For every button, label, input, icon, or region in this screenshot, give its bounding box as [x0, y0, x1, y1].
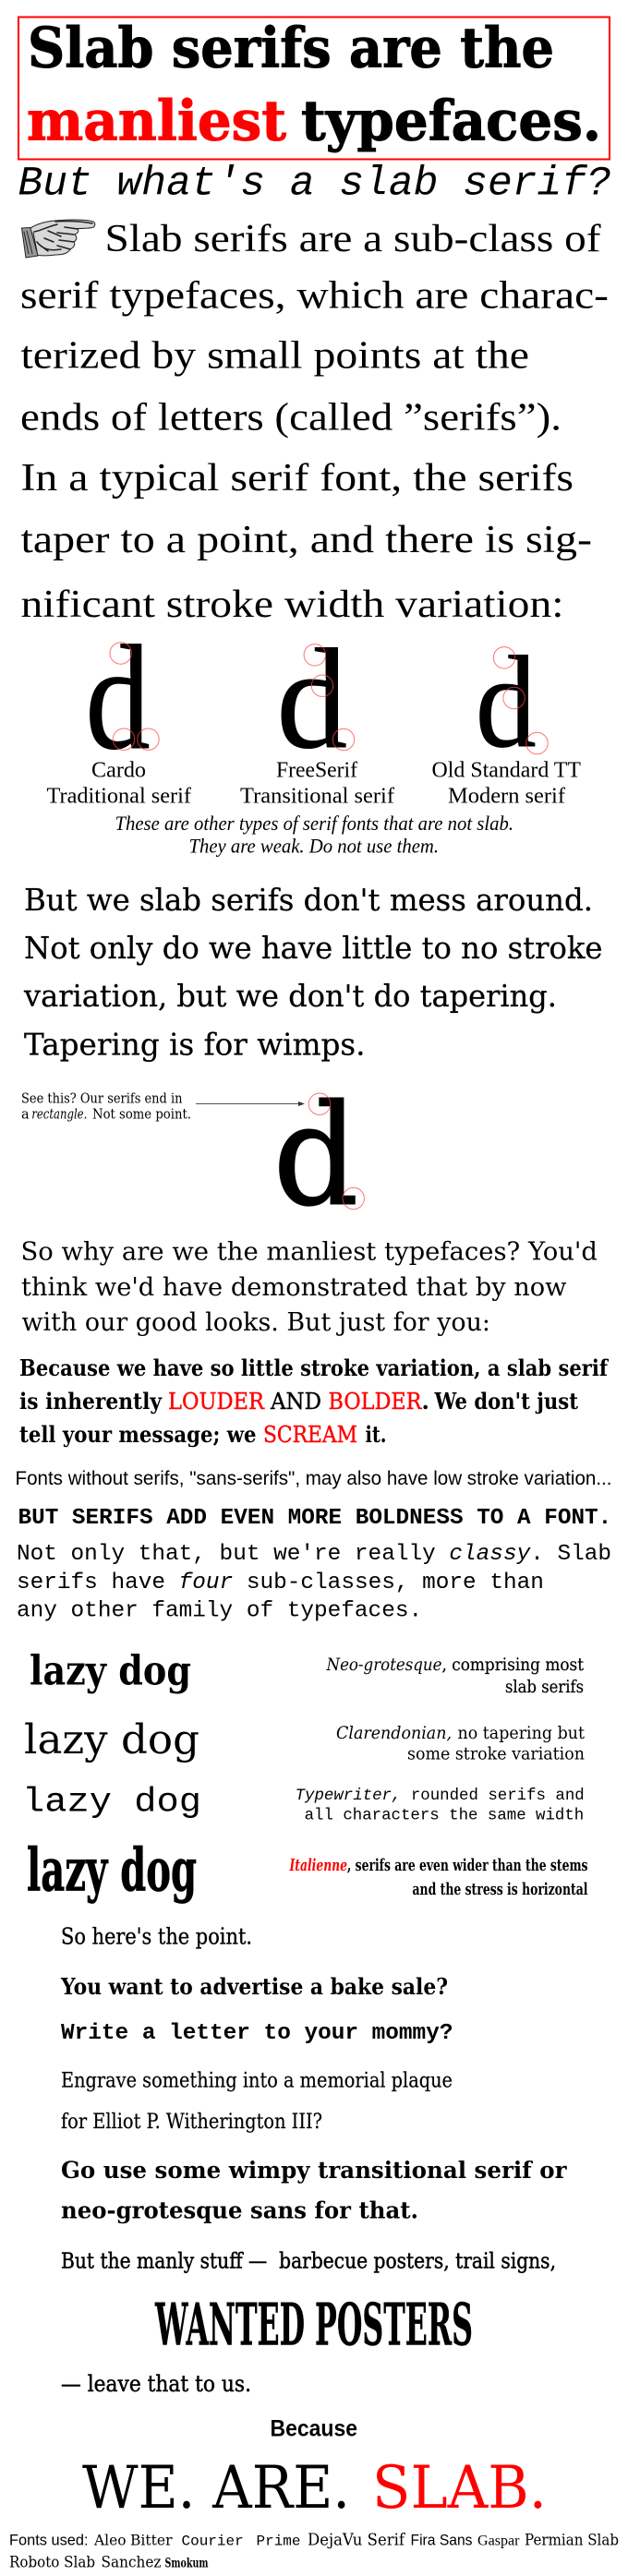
note: rectangle serifs: See this? Our serifs end in: [21, 1091, 183, 1106]
fonts used credits: Courier: [181, 2534, 244, 2550]
closing line: — leave that to us.: [61, 2371, 251, 2397]
label: Cardo: Cardo: [91, 759, 146, 783]
panel: Typewriter sample: [22, 1784, 585, 1824]
paragraph: we don't taper: But we slab serifs don't mess around.: [24, 882, 593, 918]
emphasis: BOLDER: BOLDER: [329, 1389, 422, 1414]
slab serif letter d: d: [273, 1077, 358, 1237]
label: Traditional serif: Traditional serif: [46, 785, 191, 809]
panel: Neo-grotesque sample: [30, 1647, 584, 1697]
description: Typewriter: [296, 1788, 585, 1824]
sample: lazy dog bold: lazy dog: [30, 1647, 191, 1695]
fonts used credits: Fira Sans: [410, 2532, 473, 2548]
headline: we are slab: WE. ARE.: [82, 2454, 350, 2522]
closing argument: Write a letter to your mommy?: [61, 2021, 453, 2046]
closing argument: So here's the point.: [61, 1924, 252, 1950]
caption: weak serifs: [115, 812, 513, 857]
headline: we are slab: SLAB.: [372, 2454, 547, 2522]
paragraph: we don't taper: Tapering is for wimps.: [24, 1027, 366, 1062]
paragraph: why manliest: So why are we the manliest typefaces? You'd: [20, 1237, 598, 1267]
closing argument: Engrave something into a memorial plaque: [61, 2070, 453, 2092]
paragraph: why manliest: [20, 1237, 598, 1337]
note: sans serifs: Fonts without serifs, "sans-serifs", may also have low stroke variation...: [15, 1468, 611, 1489]
paragraph: louder and bolder: [19, 1354, 609, 1448]
title line 2: typefaces: typefaces.: [301, 89, 601, 153]
note: rectangle serifs: [21, 1091, 191, 1123]
paragraph: four sub-classes: Not only that, but we're really classy. Slab: [17, 1542, 611, 1567]
fonts used credits: DejaVu Serif: [308, 2530, 405, 2550]
intro paragraph: [20, 218, 609, 626]
subheading: But what's a slab serif?: [18, 161, 611, 207]
because: Because: [270, 2415, 357, 2441]
sample: lazy dog regular: lazy dog: [24, 1716, 199, 1763]
description: Clarendonian: [336, 1723, 585, 1763]
fonts used credits: Sanchez: [102, 2554, 162, 2572]
fonts used credits: Gaspar: [477, 2534, 520, 2548]
letter d: Old Standard: d: [476, 629, 536, 775]
emphasis: SCREAM: SCREAM: [263, 1422, 357, 1448]
note: rectangle serifs: Not some point.: [92, 1108, 191, 1123]
closing argument: But the manly stuff — barbecue posters, trail signs,: [61, 2249, 556, 2273]
panel: Cardo example: [46, 616, 191, 809]
label: Transitional serif: Transitional serif: [240, 785, 394, 809]
icon: pointing hand: [22, 220, 95, 258]
description: Clarendonian: some stroke variation: [407, 1743, 585, 1763]
paragraph: why manliest: with our good looks. But just for you:: [22, 1308, 490, 1337]
paragraph: louder and bolder: tell your message; we: [19, 1421, 257, 1448]
paragraph: we don't taper: Not only do we have little to no stroke: [24, 930, 602, 966]
paragraph: four sub-classes: [17, 1542, 611, 1623]
intro paragraph: taper to a point, and there is sig-: [20, 519, 592, 561]
note: rectangle serifs: a: [21, 1108, 30, 1123]
letter d: Cardo: d: [85, 616, 150, 781]
fonts used credits: Prime: [257, 2534, 301, 2550]
caption: weak serifs: These are other types of serif fonts that are not slab.: [115, 812, 513, 835]
paragraph: louder and bolder: AND: [270, 1389, 321, 1414]
note: rectangle serifs: rectangle.: [31, 1108, 87, 1123]
closing argument: for Elliot P. Witherington III?: [61, 2111, 322, 2134]
description: Typewriter: all characters the same width: [305, 1808, 584, 1824]
fonts used credits: Permian Slab: [525, 2532, 619, 2550]
intro paragraph: In a typical serif font, the serifs: [20, 457, 574, 500]
letter d: FreeSerif: d: [277, 620, 347, 778]
closing argument: neo-grotesque sans for that.: [61, 2197, 418, 2225]
fonts used credits: Smokum: [164, 2556, 209, 2570]
panel: Old Standard TT example: [432, 629, 581, 809]
paragraph: why manliest: think we'd have demonstrated that by now: [21, 1273, 567, 1302]
intro paragraph: Slab serifs are a sub-class of: [105, 218, 601, 260]
panel: Clarendonian sample: [24, 1716, 585, 1763]
fonts used credits: Roboto Slab: [9, 2554, 95, 2572]
fonts used credits: [9, 2530, 619, 2572]
panel: FreeSerif example: [240, 620, 394, 809]
fonts used credits: Bitter: [130, 2532, 173, 2548]
intro paragraph: ends of letters (called ”serifs”).: [20, 397, 562, 439]
panel: Italienne sample: [27, 1836, 588, 1906]
paragraph: louder and bolder: .: [421, 1388, 429, 1414]
arrow: [196, 1101, 305, 1106]
description: Clarendonian: no tapering but: [458, 1723, 585, 1743]
description: Neo-grotesque: , comprising most: [441, 1655, 584, 1675]
closing argument: [60, 1924, 567, 2273]
label: FreeSerif: FreeSerif: [276, 759, 357, 783]
paragraph: four sub-classes: any other family of typefaces.: [17, 1599, 422, 1623]
headline: we are slab: [82, 2454, 547, 2522]
paragraph: we don't taper: [23, 882, 603, 1062]
closing argument: Go use some wimpy transitional serif or: [61, 2157, 567, 2185]
sample: lazy dog mono: lazy dog: [22, 1784, 201, 1823]
description: Neo-grotesque: [326, 1655, 584, 1697]
paragraph: louder and bolder: is inherently: [19, 1388, 163, 1414]
title line 1: Slab serifs are the: [28, 17, 554, 81]
description: Clarendonian: Clarendonian,: [336, 1723, 452, 1743]
description: Neo-grotesque: Neo-grotesque: [326, 1655, 441, 1675]
paragraph: four sub-classes: serifs have four sub-classes, more than: [17, 1571, 544, 1595]
label: Modern serif: Modern serif: [448, 785, 565, 809]
closing argument: You want to advertise a bake sale?: [60, 1973, 448, 2000]
title line 2: manliest: manliest: [27, 89, 286, 153]
paragraph: louder and bolder: it.: [366, 1421, 386, 1448]
caption: weak serifs: They are weak. Do not use them.: [188, 835, 439, 857]
fonts used credits: Fonts used:: [9, 2532, 89, 2548]
description: Neo-grotesque: slab serifs: [505, 1677, 584, 1697]
paragraph: we don't taper: variation, but we don't do tapering.: [23, 978, 557, 1014]
description: Typewriter: Typewriter, rounded serifs and: [296, 1788, 585, 1805]
label: Old Standard TT: Old Standard TT: [432, 759, 581, 783]
fonts used credits: Aleo: [93, 2532, 126, 2548]
description: Italienne: [289, 1856, 588, 1899]
description: Italienne: Italienne: [289, 1856, 347, 1875]
serif highlight circles: slab: [308, 1093, 364, 1210]
serif highlight circles: Old Standard: [493, 647, 548, 754]
sample: lazy dog heavy: lazy dog: [27, 1836, 197, 1906]
paragraph: louder and bolder: We don't just: [434, 1388, 578, 1414]
intro paragraph: terized by small points at the: [20, 334, 529, 377]
intro paragraph: nificant stroke width variation:: [20, 584, 563, 626]
serif highlight circles: Cardo: [110, 643, 159, 750]
intro paragraph: serif typefaces, which are charac-: [20, 275, 609, 318]
statement: serifs add boldness: BUT SERIFS ADD EVEN MORE BOLDNESS TO A FONT.: [18, 1506, 611, 1531]
title box: [18, 17, 610, 159]
serif highlight circles: FreeSerif: [304, 644, 355, 751]
emphasis: LOUDER: LOUDER: [168, 1389, 265, 1414]
